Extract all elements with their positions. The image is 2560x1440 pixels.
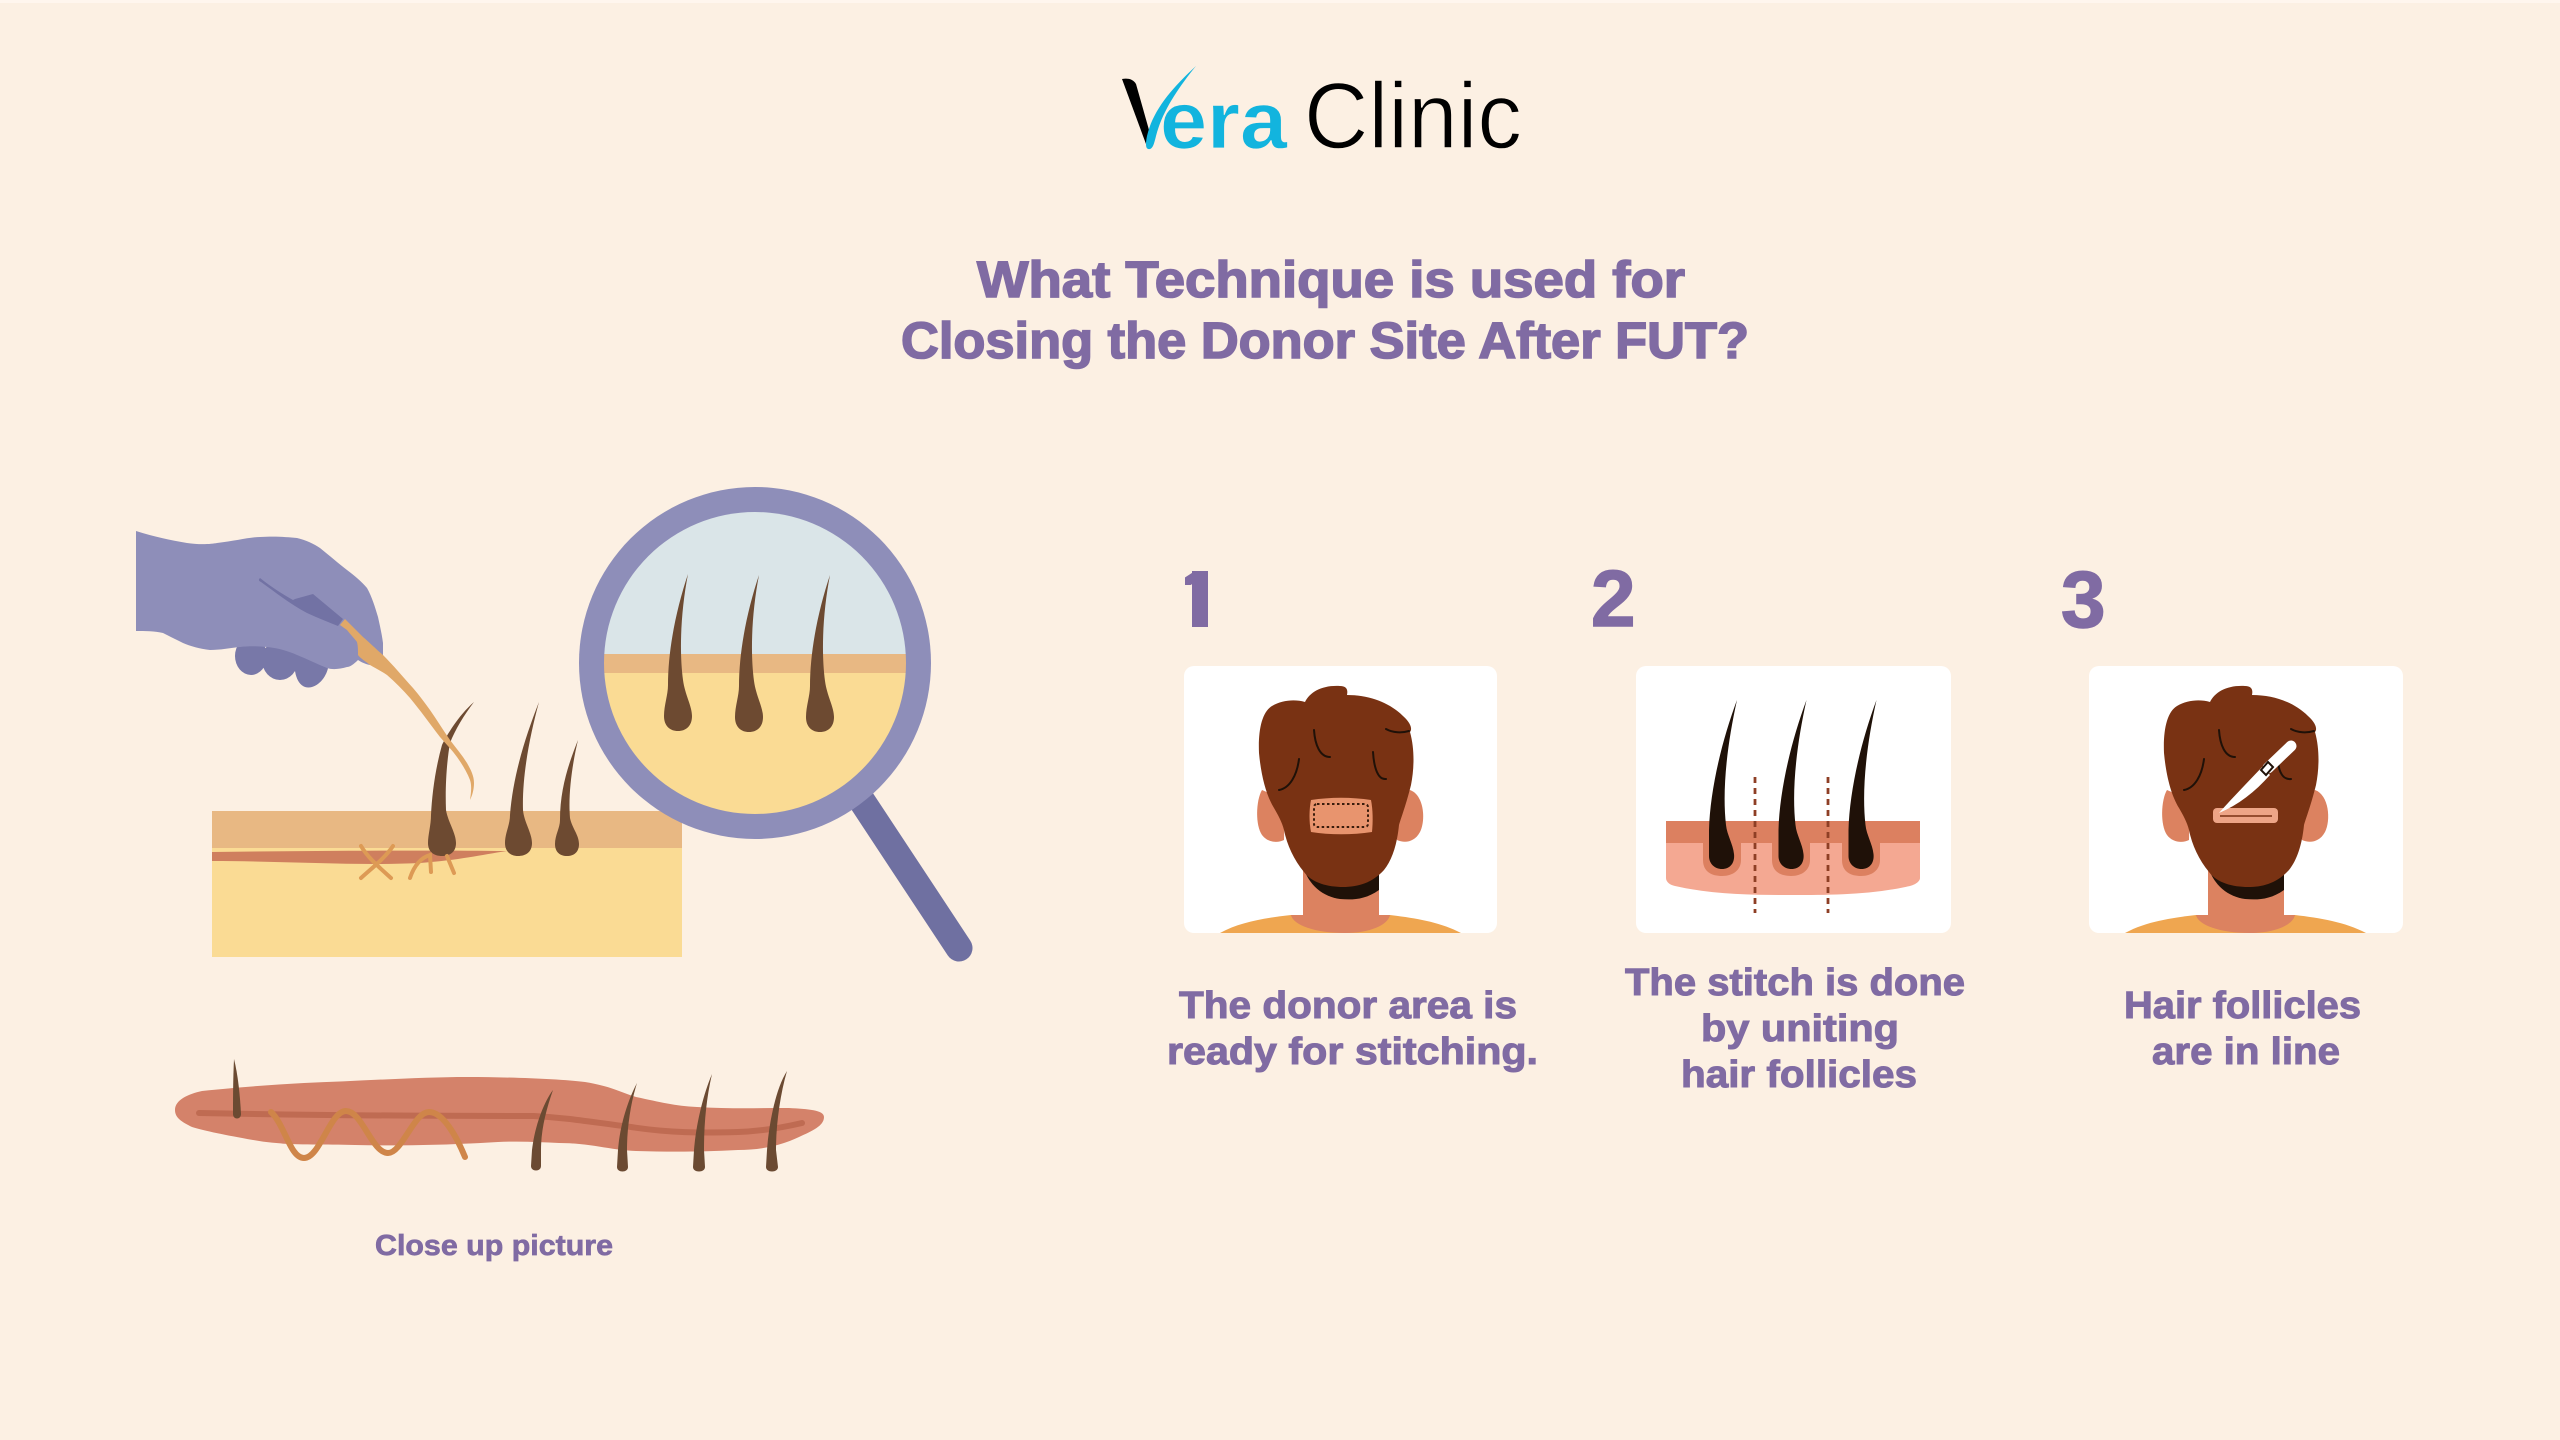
dermis xyxy=(1666,843,1920,895)
caption: step 3 xyxy=(2124,985,2361,1073)
panel: close up scar xyxy=(175,1059,824,1172)
logo word era: era xyxy=(1160,76,1288,166)
magnifier lens xyxy=(579,487,931,839)
panel: stitching illustration with magnifier xyxy=(136,487,959,957)
ears xyxy=(1257,790,1285,842)
running suture xyxy=(271,1111,465,1158)
panel: step 1 card xyxy=(1184,666,1497,933)
head hair xyxy=(1259,686,1414,887)
lens hairs xyxy=(664,574,834,732)
hairs xyxy=(1709,700,1876,869)
logo word Clinic: Clinic xyxy=(1304,63,1522,168)
dashed cut lines xyxy=(1755,777,1828,913)
caption: step 2 xyxy=(1625,962,1965,1096)
step number 3: 3 xyxy=(2061,555,2106,644)
scar shape xyxy=(175,1077,824,1152)
step number 1 xyxy=(1185,571,1208,627)
donor patch xyxy=(1310,798,1373,834)
epidermis band xyxy=(1666,821,1920,843)
hair follicles on skin xyxy=(428,702,579,856)
hair strands xyxy=(1279,729,1409,790)
hair strands xyxy=(2184,729,2314,790)
scalpel xyxy=(2219,746,2291,813)
step number 2: 2 xyxy=(1591,554,1636,643)
caption: close up picture: Close up picture xyxy=(375,1230,613,1262)
step number 1: 1 xyxy=(1176,555,1220,644)
magnifier handle xyxy=(858,795,959,948)
gloved hand xyxy=(136,531,383,687)
title line 1: What Technique is used for xyxy=(977,251,1685,308)
slit line xyxy=(2220,815,2272,817)
title xyxy=(901,251,1749,369)
fingers xyxy=(235,637,328,687)
suture thread xyxy=(340,619,474,800)
scar line xyxy=(199,1113,802,1132)
caption: step 3: are in line xyxy=(2152,1031,2340,1073)
neck xyxy=(2196,860,2295,933)
incision slit xyxy=(2213,808,2278,823)
title line 2: Closing the Donor Site After FUT? xyxy=(901,312,1749,369)
tool xyxy=(259,578,343,626)
neck beard xyxy=(1305,872,1379,899)
panel: step 3 card xyxy=(2089,666,2403,933)
caption: step 2: The stitch is done xyxy=(1625,962,1965,1004)
incision xyxy=(212,851,507,864)
glove xyxy=(136,531,383,669)
panel: step 2 card xyxy=(1636,666,1951,933)
shirt xyxy=(2125,915,2366,933)
neck xyxy=(1291,860,1390,933)
head hair xyxy=(2164,686,2318,887)
logo V black stroke xyxy=(1122,79,1149,144)
caption: step 2: by uniting xyxy=(1701,1008,1899,1050)
caption: step 3: Hair follicles xyxy=(2124,985,2361,1027)
caption: step 1 xyxy=(1167,985,1538,1073)
caption: step 1: The donor area is xyxy=(1179,985,1517,1027)
follicle sheaths xyxy=(1703,843,1880,876)
skin cross-section xyxy=(212,811,682,957)
dotted stitch outline xyxy=(1314,804,1368,827)
stitches xyxy=(361,846,454,878)
caption: step 1: ready for stitching. xyxy=(1167,1031,1538,1073)
logo: Vera Clinic xyxy=(1122,63,1522,168)
caption: step 2: hair follicles xyxy=(1681,1054,1917,1096)
neck beard xyxy=(2210,872,2284,899)
ears xyxy=(2162,790,2190,842)
scar hairs xyxy=(233,1059,787,1172)
shirt xyxy=(1220,915,1461,933)
logo swoosh xyxy=(1146,66,1196,149)
